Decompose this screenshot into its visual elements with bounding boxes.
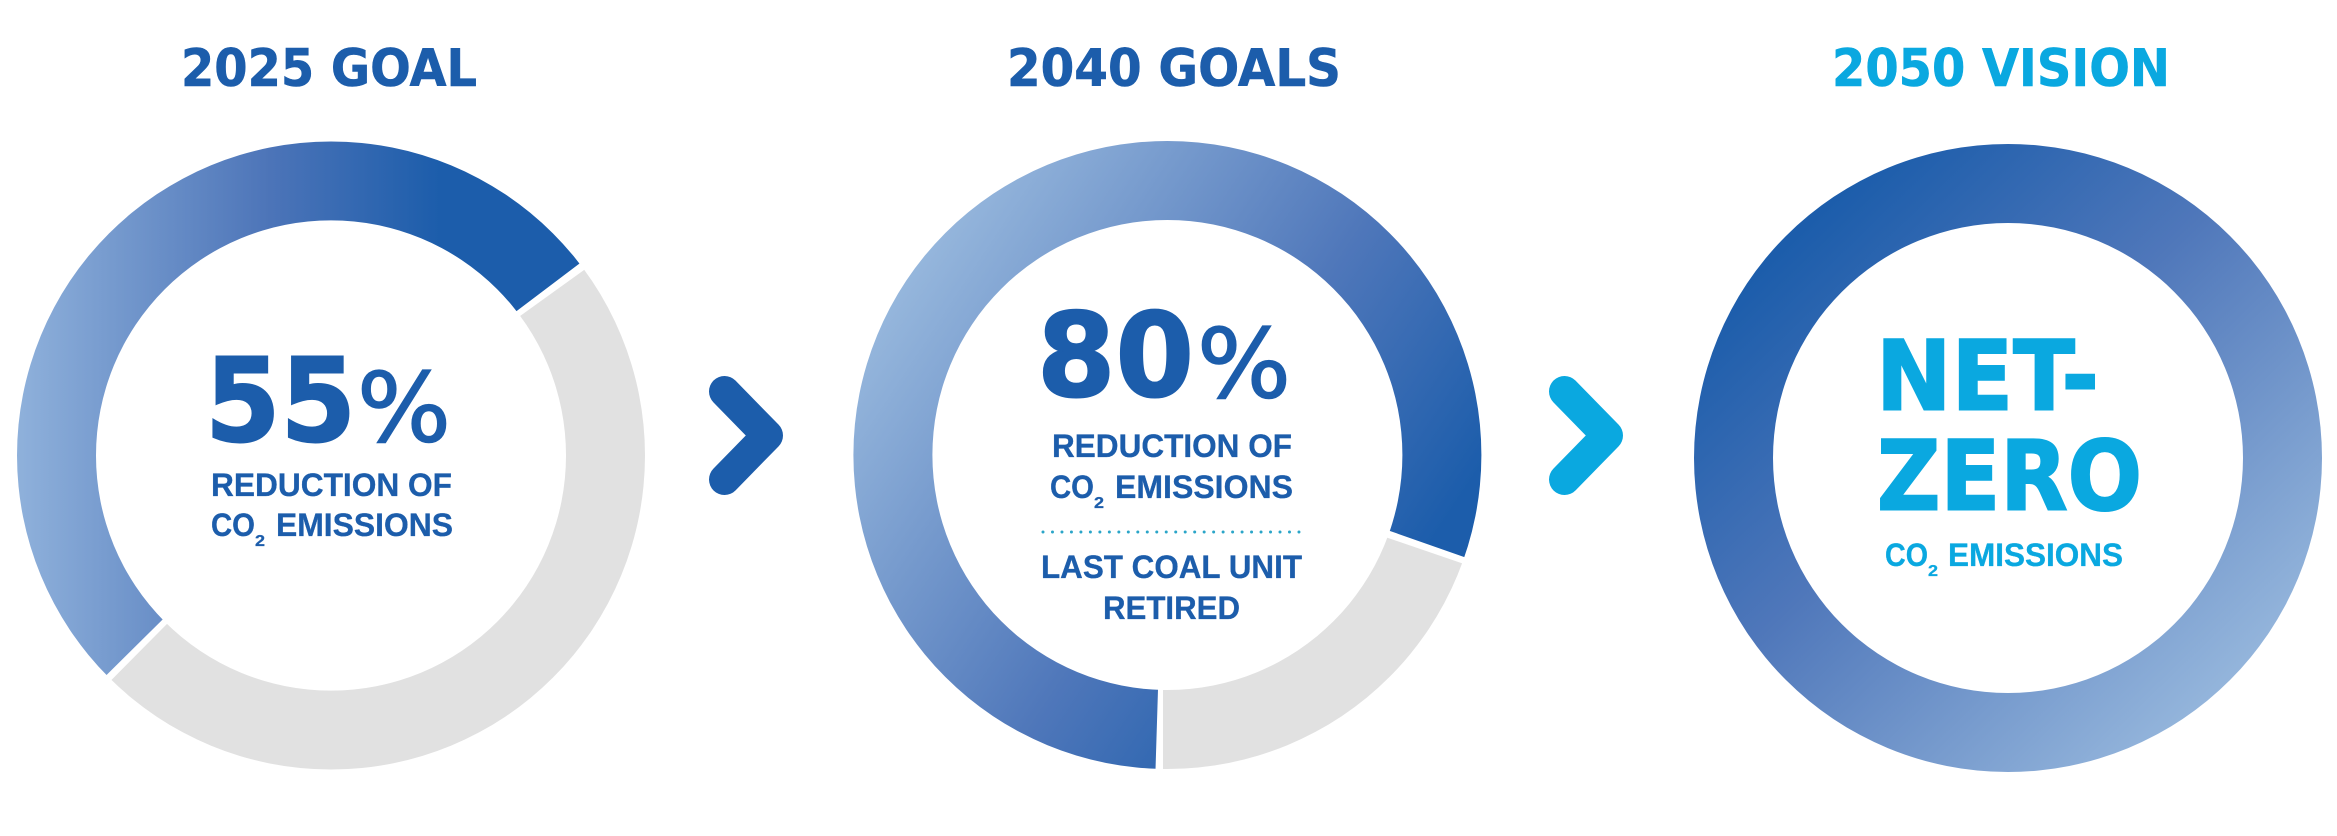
figure: net-zero: NET- — [1876, 320, 2099, 432]
heading: 2040 goals: 2040 GOALS — [1007, 39, 1341, 99]
figure: 55%: 55 — [205, 334, 356, 469]
label: reduction of CO2 emissions: REDUCTION OF — [1052, 428, 1292, 464]
label: reduction of CO2 emissions: REDUCTION OF — [211, 467, 452, 503]
figure: 55% — [205, 334, 451, 469]
panel: 2040 goals — [853, 39, 1481, 769]
remaining gray arc — [112, 270, 645, 770]
label: CO2 emissions: CO — [1885, 537, 1928, 573]
figure: 80% — [1037, 289, 1291, 424]
label: last coal unit retired: RETIRED — [1103, 590, 1240, 626]
label: reduction of CO2 emissions: CO — [1050, 469, 1094, 505]
label: reduction of CO2 emissions: EMISSIONS — [276, 507, 453, 543]
label: reduction of CO2 emissions: 2 — [1094, 495, 1104, 512]
figure: net-zero: ZERO — [1877, 420, 2142, 532]
label: last coal unit retired — [1041, 549, 1302, 626]
figure: 80%: % — [1197, 310, 1291, 420]
figure: net-zero — [1876, 320, 2142, 532]
label: last coal unit retired: LAST COAL UNIT — [1041, 549, 1302, 585]
arrow: chevron to 2050 — [1564, 392, 1608, 480]
remaining gray arc — [1163, 538, 1462, 769]
achieved blue arc — [853, 141, 1481, 769]
label: CO2 emissions: 2 — [1928, 563, 1938, 580]
label: reduction of CO2 emissions: CO — [211, 507, 255, 543]
dotted divider — [1043, 530, 1299, 534]
panel: 2025 goal — [17, 39, 645, 770]
label: reduction of CO2 emissions: 2 — [255, 533, 265, 550]
label: CO2 emissions — [1885, 537, 2123, 580]
label: reduction of CO2 emissions — [1050, 428, 1293, 512]
figure: 80%: 80 — [1037, 289, 1194, 424]
panel: 2050 vision — [1694, 39, 2322, 772]
achieved blue arc — [17, 142, 580, 675]
heading: 2025 goal: 2025 GOAL — [181, 39, 477, 99]
donut chart: full ring — [1694, 144, 2322, 772]
donut chart: 80 percent — [853, 141, 1481, 769]
label: reduction of CO2 emissions: EMISSIONS — [1115, 469, 1293, 505]
figure: 55%: % — [357, 354, 451, 464]
label: reduction of CO2 emissions — [211, 467, 453, 550]
heading: 2050 vision: 2050 VISION — [1832, 39, 2170, 99]
arrow: chevron to 2040 — [724, 392, 768, 480]
donut chart: 55 percent — [17, 142, 645, 770]
label: CO2 emissions: EMISSIONS — [1948, 537, 2123, 573]
